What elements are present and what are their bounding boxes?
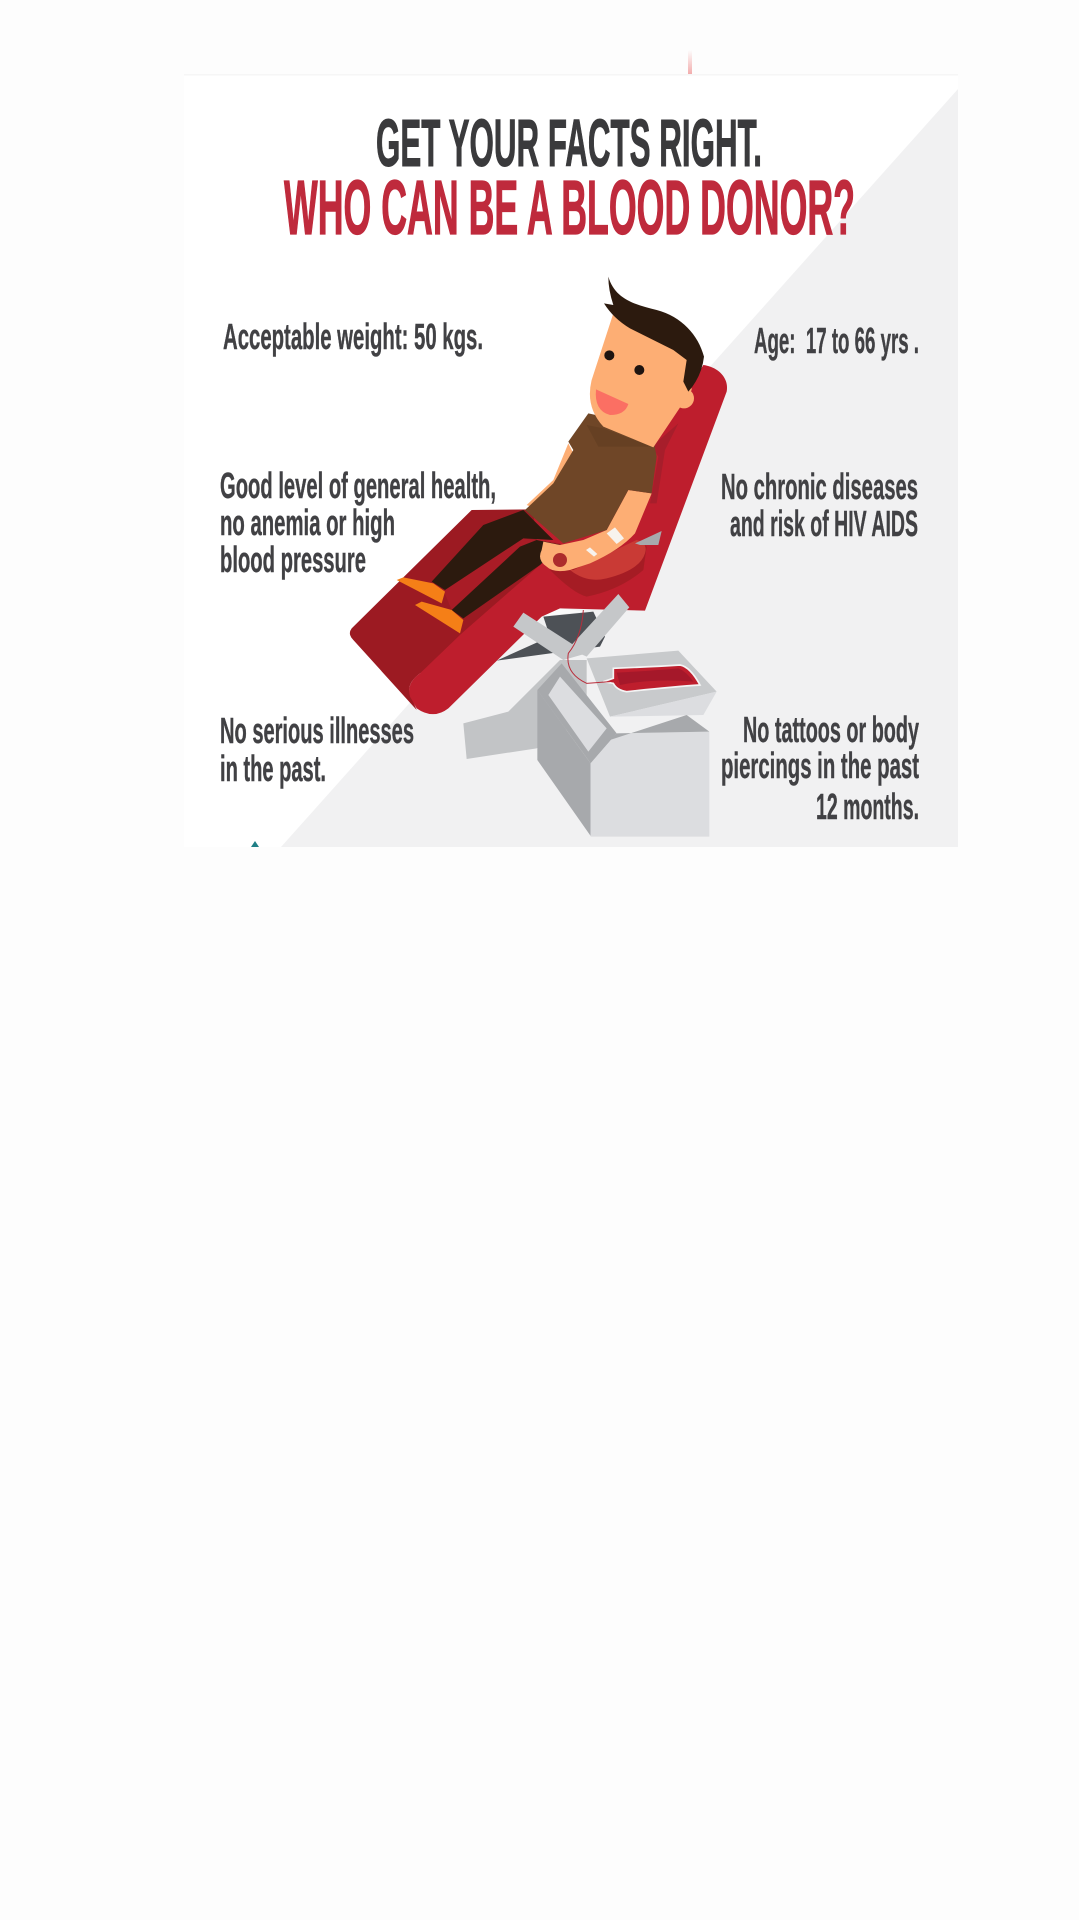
machine frame bbox=[513, 594, 629, 660]
ear bbox=[674, 388, 694, 408]
text: general health: blood pressure bbox=[220, 539, 366, 580]
left arm bbox=[527, 443, 573, 508]
text: no tattoos: piercings in the past bbox=[721, 745, 919, 786]
armrest metal bbox=[635, 531, 662, 545]
text: age: Age: 17 to 66 yrs . bbox=[754, 320, 919, 361]
shirt bbox=[525, 413, 657, 543]
text: general health: Good level of general health, bbox=[220, 465, 496, 506]
bandages bbox=[586, 527, 624, 557]
head bbox=[590, 313, 692, 447]
text: no chronic diseases: No chronic diseases bbox=[721, 466, 918, 507]
chair footrest bbox=[350, 509, 560, 710]
title bbox=[284, 106, 855, 251]
armrest shadow bbox=[550, 542, 647, 597]
palm bbox=[553, 553, 567, 567]
chair shadow strip bbox=[650, 423, 678, 503]
text: no chronic diseases bbox=[721, 466, 918, 544]
blood bag bbox=[603, 665, 700, 692]
text: acceptable weight: Acceptable weight: 50 kgs. bbox=[223, 316, 483, 357]
chair underside bbox=[497, 608, 605, 661]
text: no tattoos: 12 months. bbox=[816, 786, 919, 827]
illustration: donor in chair with machine bbox=[350, 277, 727, 837]
panel: infographic background bbox=[184, 74, 958, 847]
machine base foot bbox=[463, 660, 587, 759]
machine tray bbox=[587, 651, 717, 717]
mouth bbox=[596, 389, 628, 415]
text: no serious illnesses: in the past. bbox=[220, 748, 326, 789]
tube bbox=[568, 610, 610, 683]
text: no tattoos bbox=[721, 709, 919, 827]
chair seat and back bbox=[409, 365, 727, 714]
text: general health: no anemia or high bbox=[220, 502, 395, 543]
legs bbox=[432, 510, 562, 618]
text: general health bbox=[220, 465, 496, 580]
clipped fragment above panel bbox=[688, 50, 692, 75]
clipped teal fragment bbox=[251, 841, 259, 847]
hair bbox=[604, 277, 704, 392]
eyes bbox=[604, 350, 644, 375]
machine box bbox=[537, 663, 709, 837]
armrest pad bbox=[570, 540, 646, 580]
shirt collar bbox=[587, 425, 652, 447]
shoes bbox=[397, 577, 463, 633]
stripe between legs bbox=[443, 538, 560, 617]
text: no tattoos: No tattoos or body bbox=[743, 709, 919, 750]
right arm and hand bbox=[540, 490, 652, 571]
text: no serious illnesses: No serious illnesses bbox=[220, 710, 414, 751]
text: no chronic diseases: and risk of HIV AIDS bbox=[730, 503, 918, 544]
text: no serious illnesses bbox=[220, 710, 414, 789]
